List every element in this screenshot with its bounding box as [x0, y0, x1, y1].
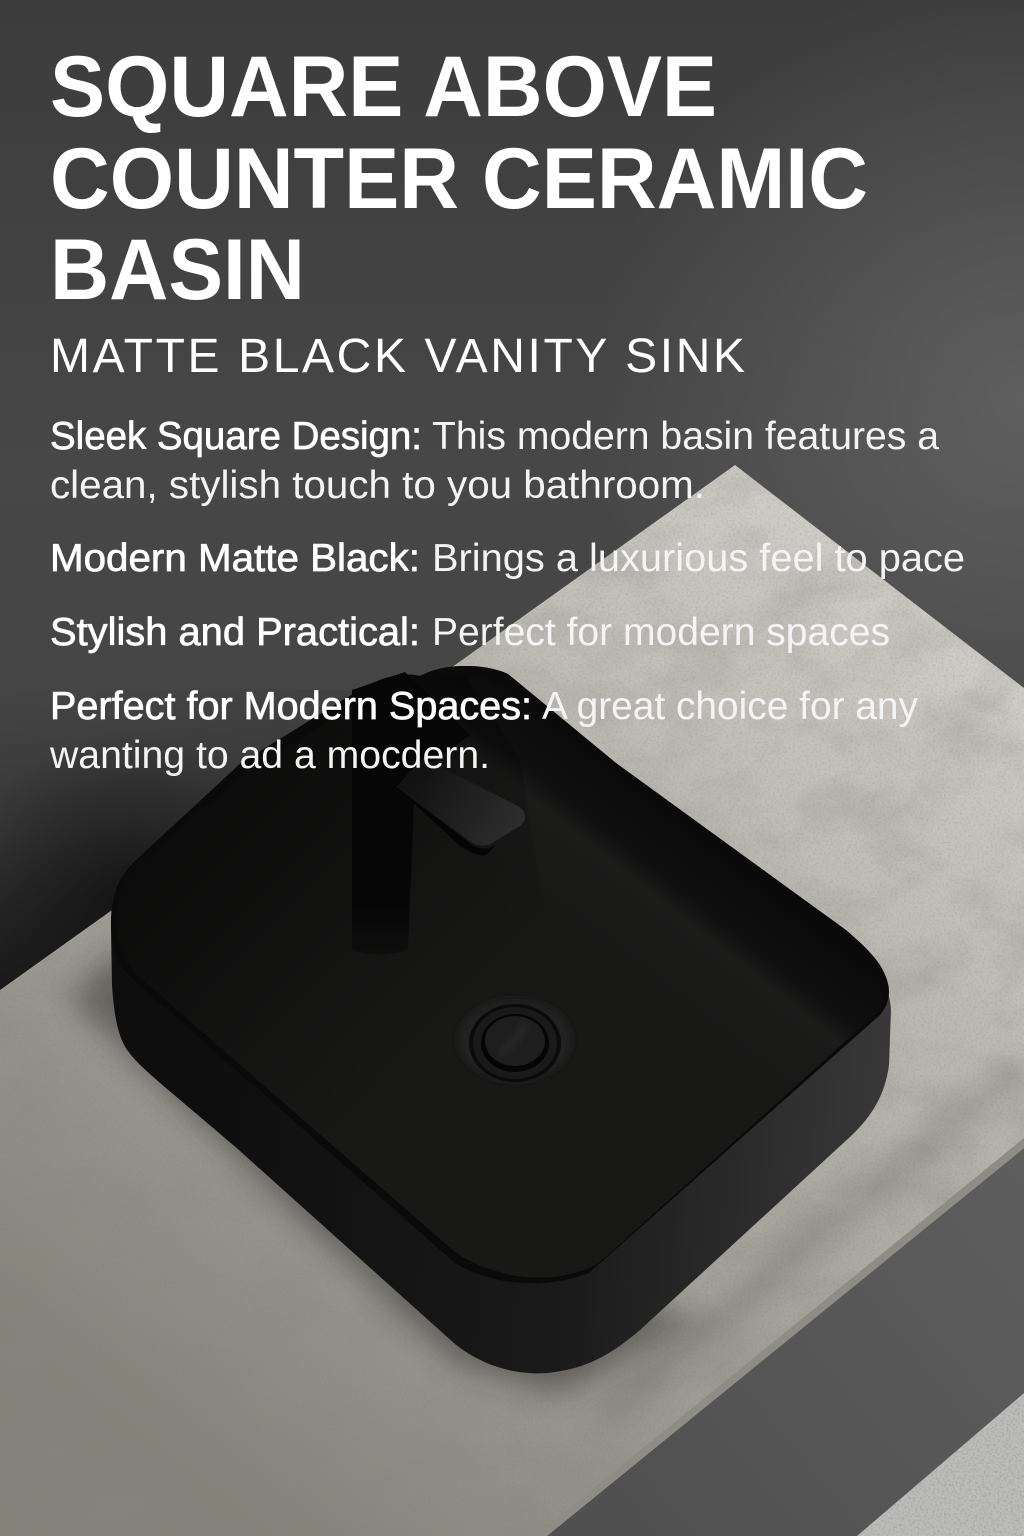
title: COUNTER CERAMIC — [50, 131, 868, 227]
floor — [850, 1390, 1024, 1536]
basin shadow on counter — [70, 950, 700, 1395]
basin outer body — [111, 666, 891, 1373]
faucet spout — [396, 758, 525, 845]
faucet — [352, 672, 525, 954]
basin inner bowl — [117, 676, 882, 1278]
feature: perfect for modern spaces: wanting to ad a mocdern. — [49, 734, 490, 777]
feature: stylish and practical: Perfect for modern spaces — [432, 611, 890, 654]
feature: stylish and practical — [50, 611, 890, 654]
basin left wall shade — [117, 676, 560, 1252]
counter front edge — [535, 1138, 1024, 1536]
countertop — [0, 465, 1024, 1536]
feature: stylish and practical: Stylish and Practical: — [50, 611, 420, 654]
basin — [111, 666, 891, 1373]
feature: perfect for modern spaces: A great choice for any — [542, 685, 918, 728]
subtitle: MATTE BLACK VANITY SINK — [50, 330, 745, 383]
title — [50, 39, 868, 318]
feature: sleek square design: This modern basin features a — [432, 415, 939, 458]
feature: perfect for modern spaces — [49, 685, 918, 777]
basin rim — [112, 666, 889, 1283]
title: BASIN — [50, 222, 305, 318]
feature: sleek square design: clean, stylish touch to you bathroom. — [50, 464, 705, 507]
drain — [459, 1000, 571, 1082]
feature: modern matte black: Brings a luxurious feel to pace — [432, 537, 965, 580]
title: SQUARE ABOVE — [50, 39, 717, 135]
feature: modern matte black: Modern Matte Black: — [50, 537, 420, 580]
feature: sleek square design — [50, 415, 939, 507]
feature: sleek square design: Sleek Square Design: — [50, 415, 422, 458]
feature: perfect for modern spaces: Perfect for Modern Spaces: — [50, 685, 532, 728]
lower panel: cabinet face — [547, 1148, 1024, 1536]
feature: modern matte black — [50, 537, 965, 580]
